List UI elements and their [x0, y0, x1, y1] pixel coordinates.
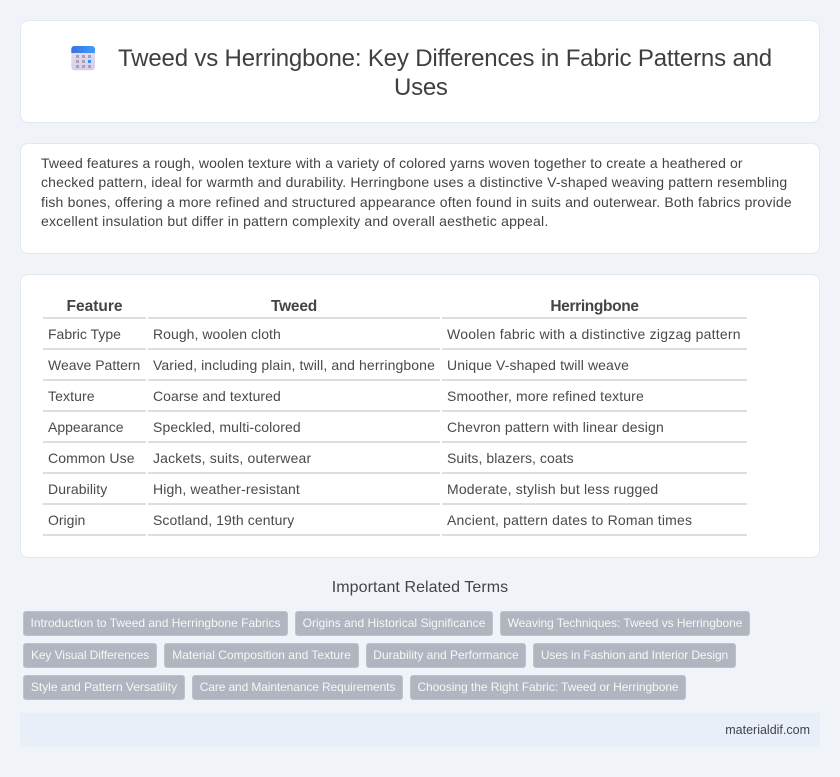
row: weave pattern: Unique V-shaped twill weave [447, 357, 629, 373]
row: durability: Durability [48, 481, 107, 497]
row: appearance: Chevron pattern with linear design [447, 419, 664, 435]
row: common use: Jackets, suits, outerwear [153, 450, 311, 466]
row: common use: Suits, blazers, coats [447, 450, 574, 466]
row: weave pattern: Varied, including plain, twill, and herringbone [153, 357, 435, 373]
row: origin: Origin [48, 512, 85, 528]
tag: Care and Maintenance Requirements [200, 680, 395, 694]
tag: Weaving Techniques: Tweed vs Herringbone [508, 616, 742, 630]
tag: Origins and Historical Significance [303, 616, 485, 630]
table header: Herringbone [550, 298, 639, 315]
tag [366, 643, 526, 668]
tag [410, 675, 686, 700]
text block: description: excellent insulation but differ in pattern complexity and overall aesthetic appeal. [41, 213, 548, 229]
tag [164, 643, 359, 668]
row: common use [48, 450, 574, 466]
table header [66, 298, 639, 315]
row: fabric type [48, 326, 741, 342]
text block: description: checked pattern, ideal for warmth and durability. Herringbone uses a distinctive V-shaped weaving pattern resembling [41, 174, 787, 190]
panel: description [20, 143, 820, 254]
row: weave pattern: Weave Pattern [48, 357, 140, 373]
row: texture: Texture [48, 388, 95, 404]
row: texture [48, 388, 644, 404]
row: origin [48, 512, 692, 528]
row: fabric type: Fabric Type [48, 326, 121, 342]
tag: Style and Pattern Versatility [31, 680, 177, 694]
table header: Tweed [271, 298, 317, 315]
tag: Uses in Fashion and Interior Design [541, 648, 728, 662]
title: Uses [394, 74, 448, 101]
row: fabric type: Rough, woolen cloth [153, 326, 281, 342]
footer [20, 713, 820, 747]
text block: description: Tweed features a rough, woolen texture with a variety of colored yarns woven together to create a heathered or [41, 155, 743, 171]
text block: description [41, 155, 792, 229]
row: durability: High, weather-resistant [153, 481, 300, 497]
tag: Material Composition and Texture [172, 648, 351, 662]
tag [192, 675, 403, 700]
tag [23, 643, 157, 668]
tag [23, 675, 185, 700]
row: weave pattern [48, 357, 629, 373]
heading: important related terms: Important Related Terms [332, 579, 508, 596]
row: texture: Smoother, more refined texture [447, 388, 644, 404]
tag [500, 611, 750, 636]
row: texture: Coarse and textured [153, 388, 281, 404]
row: fabric type: Woolen fabric with a distinctive zigzag pattern [447, 326, 741, 342]
tag [23, 611, 288, 636]
tag: Choosing the Right Fabric: Tweed or Herringbone [417, 680, 679, 694]
tag: Key Visual Differences [31, 648, 149, 662]
panel: comparison table [20, 274, 820, 558]
title: Tweed vs Herringbone: Key Differences in Fabric Patterns and [118, 45, 772, 72]
title [118, 45, 772, 101]
tag: Durability and Performance [373, 648, 519, 662]
row: appearance: Appearance [48, 419, 124, 435]
row: origin: Ancient, pattern dates to Roman times [447, 512, 692, 528]
text block: description: fish bones, offering a more refined and structured appearance often found in suits and outerwear. Both fabrics provide [41, 194, 792, 210]
icon: calendar [71, 46, 95, 70]
table header: Feature [66, 298, 122, 315]
tag [533, 643, 736, 668]
row: common use: Common Use [48, 450, 135, 466]
panel: header [20, 20, 820, 123]
comparison table [43, 298, 747, 536]
row: durability [48, 481, 658, 497]
row: appearance: Speckled, multi-colored [153, 419, 301, 435]
row: durability: Moderate, stylish but less rugged [447, 481, 658, 497]
row: origin: Scotland, 19th century [153, 512, 294, 528]
tag [295, 611, 493, 636]
footer source text: materialdif.com [725, 723, 810, 737]
tag: Introduction to Tweed and Herringbone Fabrics [31, 616, 280, 630]
row: appearance [48, 419, 664, 435]
